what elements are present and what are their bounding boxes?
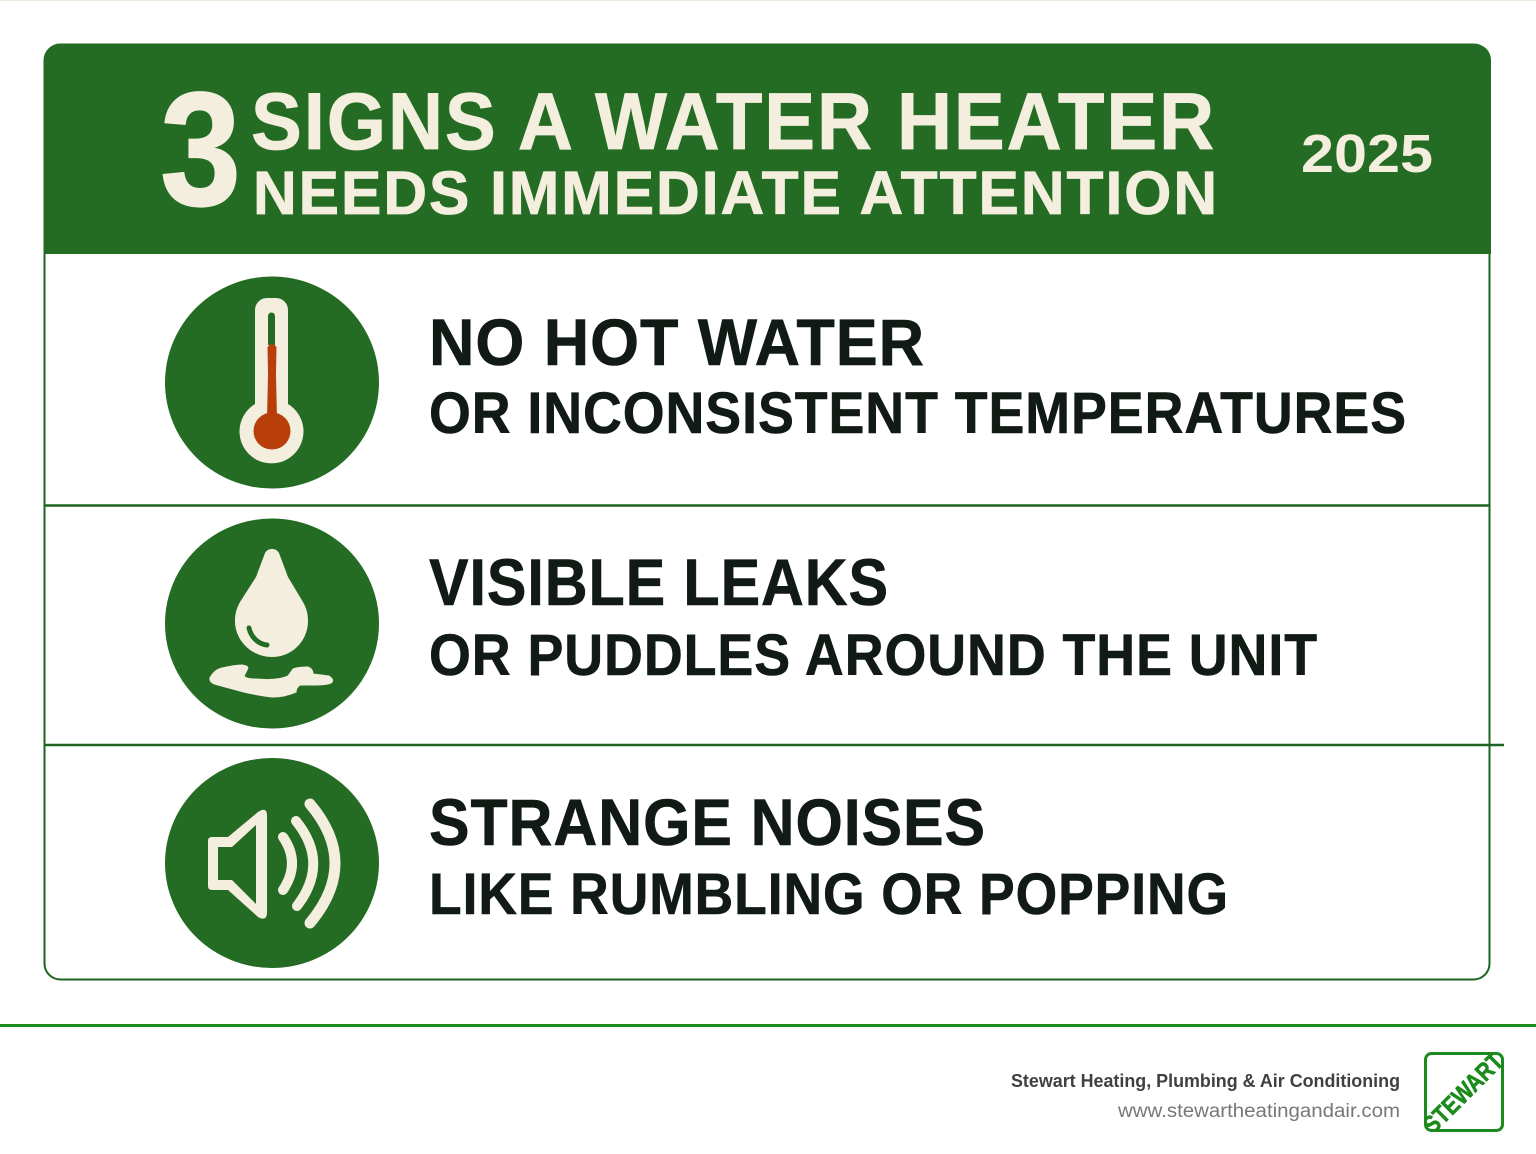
panel: signs list frame bbox=[44, 44, 1490, 980]
sign 3: strange noises bbox=[165, 758, 1229, 968]
title line 1: SIGNS A WATER HEATER bbox=[251, 77, 1216, 167]
icon: speaker with sound waves bbox=[165, 758, 379, 968]
sign 3 detail: LIKE RUMBLING OR POPPING bbox=[429, 862, 1229, 927]
sign 2 heading: VISIBLE LEAKS bbox=[429, 545, 889, 619]
title number: 3 bbox=[160, 58, 241, 240]
icon: water drop and puddle bbox=[165, 518, 379, 728]
title line 2: NEEDS IMMEDIATE ATTENTION bbox=[253, 159, 1219, 227]
sign 1 detail: OR INCONSISTENT TEMPERATURES bbox=[429, 381, 1407, 446]
sign 2: visible leaks bbox=[165, 518, 1318, 728]
footer company name: Stewart Heating, Plumbing & Air Conditioning bbox=[1011, 1071, 1400, 1091]
sign 1: no hot water bbox=[165, 276, 1407, 488]
year: 2025 bbox=[1301, 124, 1433, 184]
logo: Stewart: STEWART bbox=[1417, 1047, 1509, 1139]
sign 3 heading: STRANGE NOISES bbox=[429, 785, 986, 859]
footer website: www.stewartheatingandair.com bbox=[1117, 1101, 1400, 1122]
sign 2 detail: OR PUDDLES AROUND THE UNIT bbox=[429, 623, 1318, 688]
icon: thermometer bbox=[165, 276, 379, 488]
header banner bbox=[44, 44, 1491, 254]
logo: Stewart bbox=[1424, 1052, 1504, 1132]
sign 1 heading: NO HOT WATER bbox=[429, 305, 925, 379]
